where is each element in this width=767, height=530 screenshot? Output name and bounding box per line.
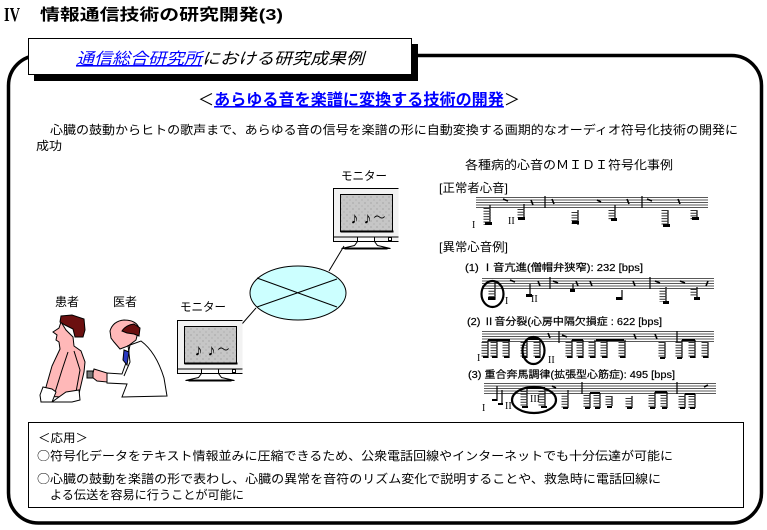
score: normal: I	[472, 220, 475, 231]
title: IV	[4, 4, 20, 26]
MIDI caption: 各種病的心音のＭＩＤＩ符号化事例	[465, 157, 673, 172]
application item 2	[37, 470, 661, 502]
intro text	[36, 122, 738, 153]
network lines	[242, 246, 344, 324]
icon: network ellipse	[250, 266, 346, 320]
label: patient: 患者	[55, 295, 79, 309]
label: case 3: (3) 重合奔馬調律(拡張型心筋症): 495 [bps]	[468, 368, 675, 381]
application item 2: よる伝送を容易に行うことが可能に	[50, 487, 244, 502]
score: case 1: II	[531, 294, 538, 305]
score: case 3: I	[482, 403, 485, 414]
applications heading: ＜応用＞	[38, 431, 88, 445]
score: case 2: II	[548, 355, 555, 366]
score: case 2: I	[477, 353, 480, 364]
label: case 2: (2) Ⅱ音分裂(心房中隔欠損症 : 622 [bps]	[467, 315, 662, 328]
title	[4, 4, 283, 26]
score: case 3: III	[530, 394, 540, 405]
icon: patient	[40, 315, 85, 402]
label: normal heart sound: [正常者心音]	[439, 181, 508, 195]
panel: applications	[28, 422, 744, 508]
score: normal: II	[508, 216, 515, 227]
intro text: 心臓の鼓動からヒトの歌声まで、あらゆる音の信号を楽譜の形に自動変換する画期的なオーディオ符号化技術の開発に	[50, 122, 738, 137]
application item 2: ○心臓の鼓動を楽譜の形で表わし、心臓の異常を音符のリズム変化で説明することや、救急時に電話回線に	[37, 470, 661, 487]
title: 情報通信技術の研究開発(3)	[40, 5, 283, 24]
panel heading box: 通信総合研究所 における研究成果例	[76, 50, 367, 68]
icon: lower monitor	[178, 320, 242, 380]
icon: upper monitor	[334, 188, 398, 248]
intro text: 成功	[36, 139, 62, 153]
label: abnormal heart sound: [異常心音例]	[439, 240, 508, 254]
label: case 1: (1) Ⅰ音亢進(僧帽弁狭窄): 232 [bps]	[465, 261, 643, 274]
score: case 1	[482, 277, 714, 307]
icon: doctor	[87, 320, 167, 397]
label: doctor: 医者	[113, 295, 137, 309]
application item 1: ○符号化データをテキスト情報並みに圧縮できるため、公衆電話回線やインターネットでも十分伝達が可能に	[37, 447, 673, 464]
subheading: ＜あらゆる音を楽譜に変換する技術の開発＞	[198, 90, 520, 109]
score: case 3: II	[505, 401, 512, 412]
label: upper monitor: モニター	[341, 169, 387, 183]
panel heading box	[28, 38, 418, 81]
score: case 1: I	[505, 296, 508, 307]
score: case 3	[482, 382, 716, 414]
score: normal	[472, 196, 708, 231]
score: case 2	[477, 331, 714, 366]
label: lower monitor: モニター	[180, 300, 226, 314]
